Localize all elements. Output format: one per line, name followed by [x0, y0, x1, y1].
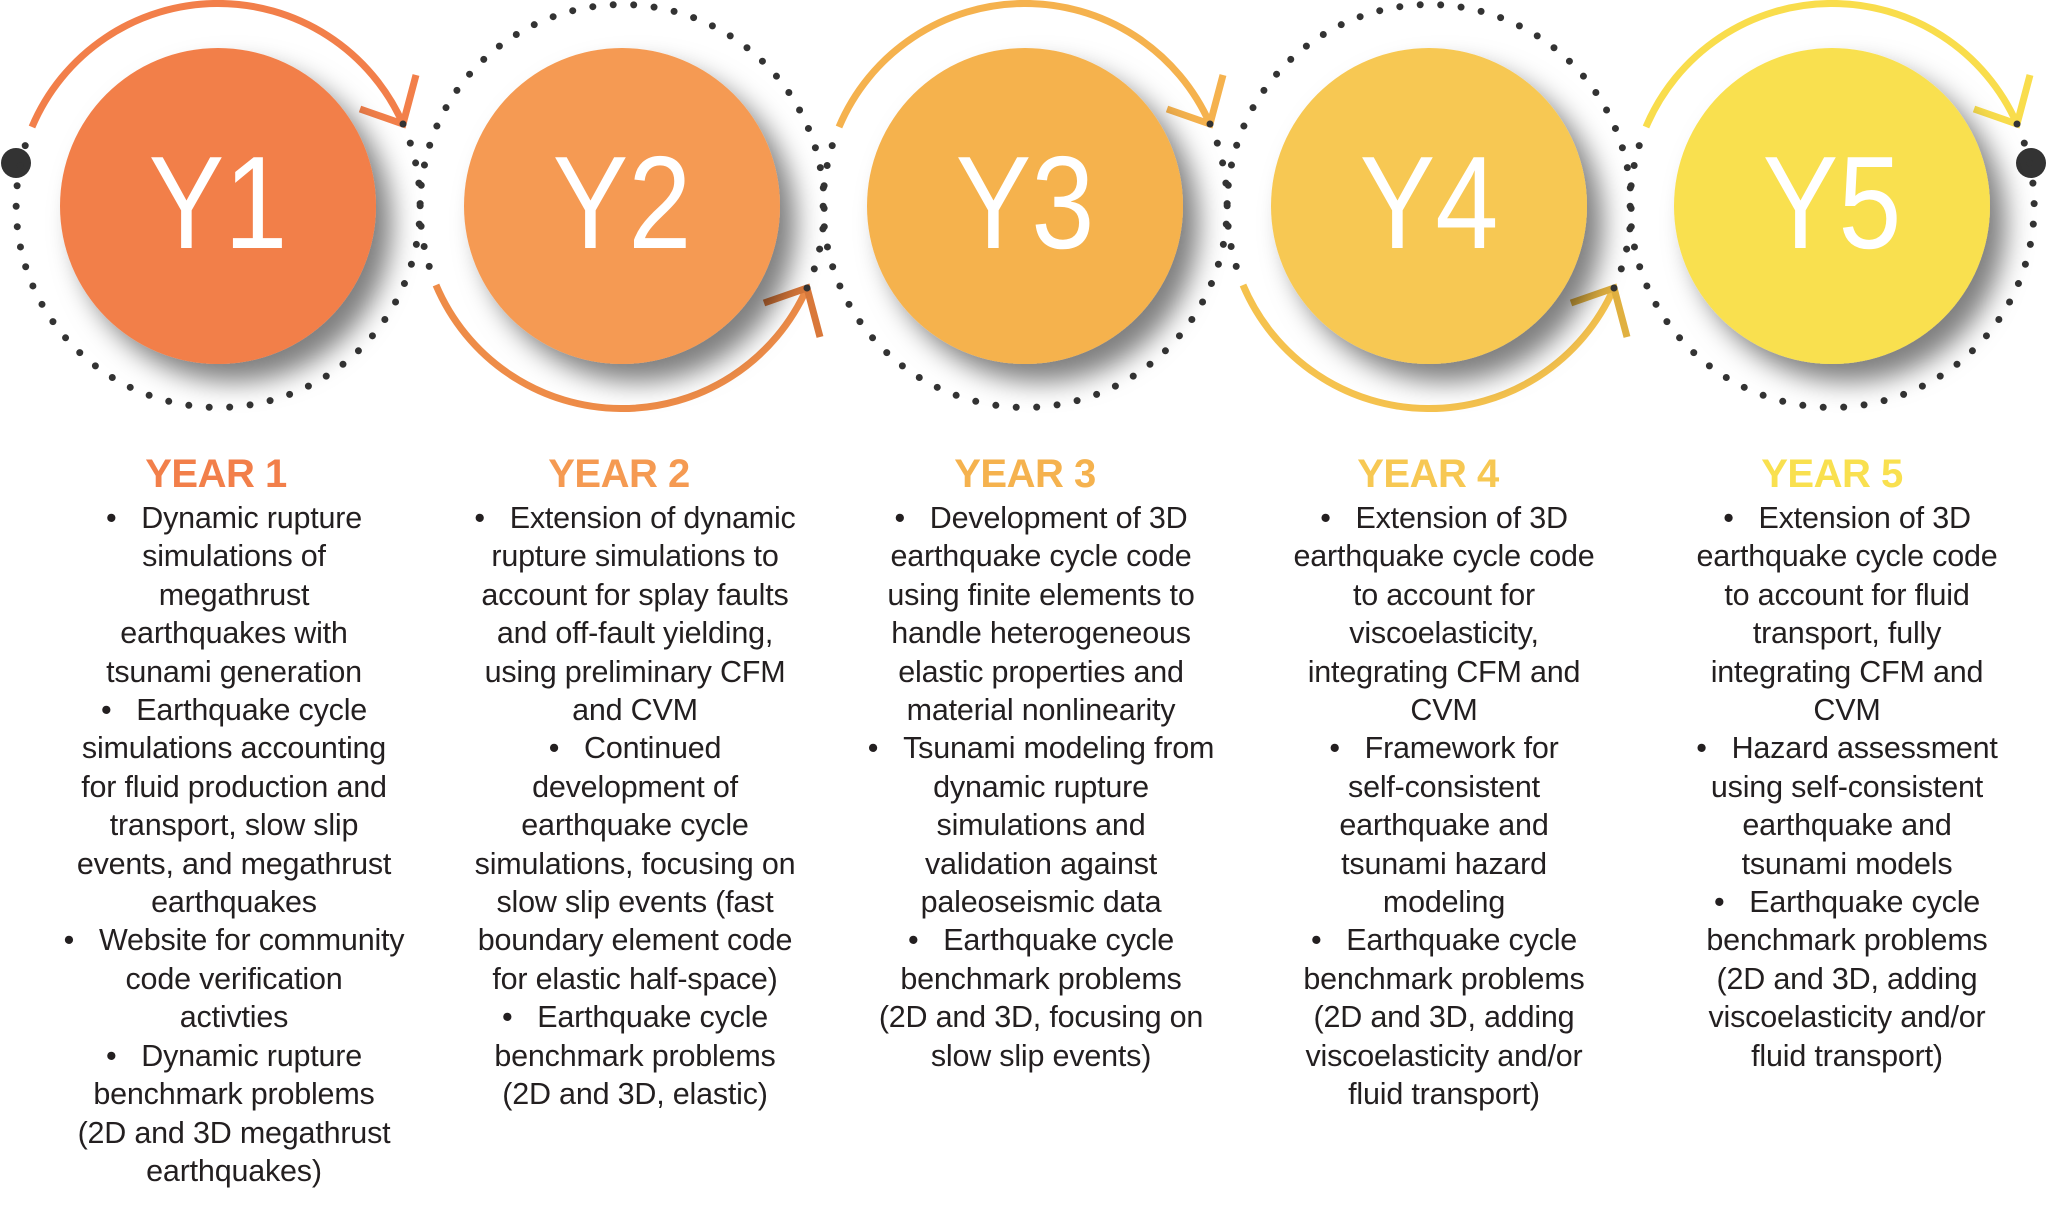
- text: year 5: viscoelasticity and/or: [1708, 1000, 1986, 1034]
- text: year 1: [64, 501, 404, 1188]
- text: year 4: viscoelasticity,: [1349, 616, 1539, 650]
- text: year 2: rupture simulations to: [491, 539, 779, 573]
- text: year 1: • Earthquake cycle: [101, 693, 367, 727]
- text: year 4: integrating CFM and: [1308, 655, 1580, 689]
- heading: year 2: YEAR 2: [548, 452, 690, 496]
- text: year 1: transport, slow slip: [110, 808, 358, 842]
- stage Y5: Y5: [1763, 130, 1901, 277]
- text: year 1: • Dynamic rupture: [106, 1039, 362, 1073]
- stage Y3: Y3: [956, 130, 1094, 277]
- text: year 1: (2D and 3D megathrust: [78, 1116, 390, 1150]
- text: year 5: transport, fully: [1753, 616, 1941, 650]
- heading: year 1: YEAR 1: [145, 452, 287, 496]
- text: year 4: tsunami hazard: [1341, 847, 1547, 881]
- text: year 2: account for splay faults: [481, 578, 789, 612]
- stage Y5: [1630, 3, 2034, 407]
- text: year 2: for elastic half-space): [492, 962, 778, 996]
- text: year 5: benchmark problems: [1706, 923, 1988, 957]
- text: year 5: earthquake cycle code: [1696, 539, 1998, 573]
- stage Y3: [823, 3, 1227, 407]
- text: year 5: integrating CFM and: [1711, 655, 1983, 689]
- text: year 3: • Tsunami modeling from: [868, 731, 1214, 765]
- text: year 5: fluid transport): [1751, 1039, 1943, 1073]
- text: year 4: CVM: [1410, 693, 1478, 727]
- stage Y2: [420, 5, 824, 409]
- text: year 3: • Earthquake cycle: [908, 923, 1174, 957]
- text: year 1: for fluid production and: [81, 770, 387, 804]
- text: year 2: earthquake cycle: [521, 808, 749, 842]
- text: year 4: • Earthquake cycle: [1311, 923, 1577, 957]
- text: year 1: events, and megathrust: [77, 847, 391, 881]
- text: year 2: and off-fault yielding,: [497, 616, 773, 650]
- text: year 2: benchmark problems: [494, 1039, 776, 1073]
- text: year 5: • Extension of 3D: [1723, 501, 1971, 535]
- text: year 3: (2D and 3D, focusing on: [879, 1000, 1203, 1034]
- text: year 5: CVM: [1813, 693, 1881, 727]
- stage Y4: Y4: [1360, 130, 1498, 277]
- text: year 4: modeling: [1383, 885, 1505, 919]
- text: year 4: • Extension of 3D: [1320, 501, 1568, 535]
- text: year 5: to account for fluid: [1724, 578, 1970, 612]
- heading: year 5: YEAR 5: [1761, 452, 1903, 496]
- stage Y1: [16, 3, 420, 407]
- text: year 2: slow slip events (fast: [496, 885, 773, 919]
- text: year 3: paleoseismic data: [921, 885, 1161, 919]
- text: year 3: material nonlinearity: [907, 693, 1175, 727]
- text: year 3: slow slip events): [931, 1039, 1151, 1073]
- stage Y1: Y1: [149, 130, 287, 277]
- text: year 5: tsunami models: [1742, 847, 1952, 881]
- stage Y4: [1227, 5, 1631, 409]
- text: year 4: self-consistent: [1348, 770, 1540, 804]
- text: year 5: • Hazard assessment: [1696, 731, 1998, 765]
- text: year 5: using self-consistent: [1711, 770, 1983, 804]
- heading: year 3: YEAR 3: [954, 452, 1096, 496]
- text: year 1: • Dynamic rupture: [106, 501, 362, 535]
- text: year 5: [1696, 501, 1998, 1073]
- text: year 1: simulations of: [142, 539, 326, 573]
- start dot: [1, 148, 31, 178]
- text: year 1: simulations accounting: [82, 731, 386, 765]
- text: year 4: to account for: [1353, 578, 1535, 612]
- text: year 1: tsunami generation: [106, 655, 362, 689]
- stage Y2: Y2: [553, 130, 691, 277]
- text: year 5: (2D and 3D, adding: [1717, 962, 1977, 996]
- text: year 2: simulations, focusing on: [475, 847, 795, 881]
- end dot: [2016, 148, 2046, 178]
- text: year 3: • Development of 3D: [894, 501, 1187, 535]
- text: year 2: • Continued: [549, 731, 721, 765]
- text: year 3: using finite elements to: [887, 578, 1195, 612]
- text: year 3: [868, 501, 1214, 1073]
- text: year 3: handle heterogeneous: [891, 616, 1191, 650]
- text: year 3: benchmark problems: [900, 962, 1182, 996]
- text: year 5: earthquake and: [1742, 808, 1952, 842]
- text: year 2: boundary element code: [478, 923, 792, 957]
- text: year 4: fluid transport): [1348, 1077, 1540, 1111]
- text: year 1: code verification: [126, 962, 342, 996]
- text: year 2: • Extension of dynamic: [474, 501, 796, 535]
- text: year 3: dynamic rupture: [933, 770, 1149, 804]
- text: year 2: • Earthquake cycle: [502, 1000, 768, 1034]
- text: year 4: benchmark problems: [1303, 962, 1585, 996]
- text: year 1: activties: [180, 1000, 288, 1034]
- heading: year 4: YEAR 4: [1357, 452, 1499, 496]
- text: year 3: earthquake cycle code: [890, 539, 1192, 573]
- text: year 5: • Earthquake cycle: [1714, 885, 1980, 919]
- text: year 4: (2D and 3D, adding: [1314, 1000, 1574, 1034]
- text: year 2: development of: [532, 770, 738, 804]
- text: year 1: earthquakes with: [120, 616, 348, 650]
- text: year 2: and CVM: [572, 693, 698, 727]
- text: year 4: earthquake cycle code: [1294, 539, 1594, 573]
- text: year 1: earthquakes): [146, 1154, 322, 1188]
- text: year 4: earthquake and: [1339, 808, 1549, 842]
- text: year 4: [1294, 501, 1594, 1111]
- text: year 1: megathrust: [159, 578, 309, 612]
- text: year 3: validation against: [925, 847, 1157, 881]
- text: year 2: (2D and 3D, elastic): [502, 1077, 768, 1111]
- text: year 4: • Framework for: [1329, 731, 1559, 765]
- text: year 2: using preliminary CFM: [485, 655, 785, 689]
- text: year 1: earthquakes: [151, 885, 317, 919]
- text: year 4: viscoelasticity and/or: [1306, 1039, 1582, 1073]
- text: year 1: • Website for community: [64, 923, 404, 957]
- text: year 1: benchmark problems: [93, 1077, 375, 1111]
- text: year 3: simulations and: [937, 808, 1145, 842]
- text: year 2: [474, 501, 796, 1111]
- text: year 3: elastic properties and: [898, 655, 1184, 689]
